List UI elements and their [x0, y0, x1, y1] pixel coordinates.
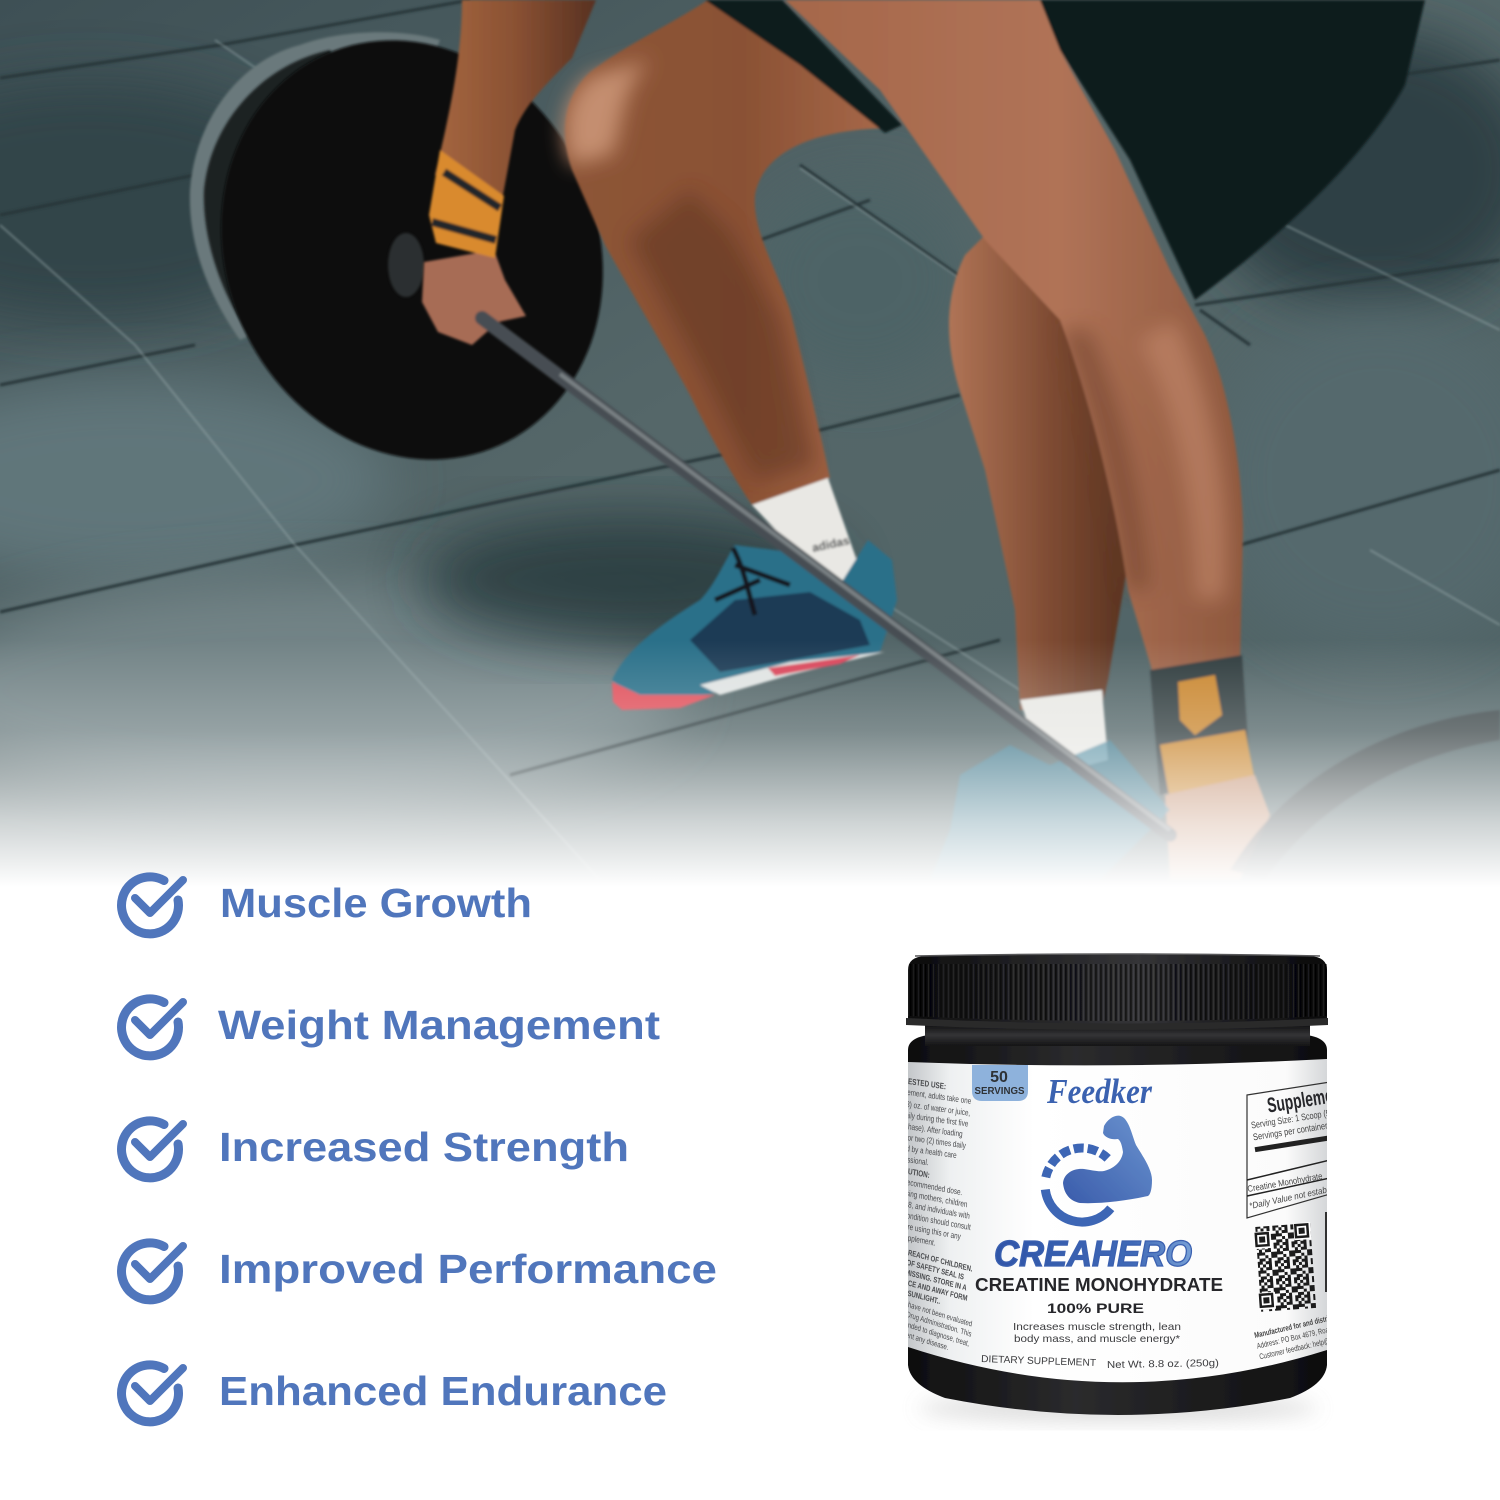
weight plate: [188, 32, 604, 462]
servings badge: SERVINGS: [974, 1086, 1025, 1097]
figure: limbs, shorts, shoes: [422, 0, 1500, 880]
socks: adidas: [811, 533, 851, 555]
shorts: [705, 0, 1425, 300]
usage and warning text: sing mothers, children: [905, 1188, 968, 1210]
usage and warning text: 8) oz. of water or juice,: [906, 1099, 971, 1118]
jar neck: [925, 1024, 1310, 1046]
benefit: improved performance: Improved Performance: [219, 1246, 717, 1292]
usage and warning text: OF SAFETY SEAL IS: [906, 1259, 965, 1282]
usage and warning text: ended to diagnose, treat,: [904, 1321, 970, 1349]
usage and warning text: ed by a health care: [902, 1143, 957, 1160]
usage and warning text: vent any disease.: [902, 1331, 949, 1352]
foreground plate: [1230, 710, 1500, 880]
manufacturer text: Manufactured for and distributed: [1253, 1310, 1345, 1340]
supplement type and net weight: Net Wt. 8.8 oz. (250g): [1107, 1358, 1219, 1371]
benefit list: [122, 877, 717, 1422]
check icon: [122, 1121, 183, 1178]
check icon: [122, 1243, 183, 1300]
usage and warning text: condition should consult: [903, 1210, 972, 1233]
usage and warning text: phase). After loading: [904, 1121, 963, 1139]
shadow on floor: [420, 515, 840, 645]
product subtitle: CREATINE MONOHYDRATE: [975, 1275, 1223, 1295]
benefit: enhanced endurance: Enhanced Endurance: [219, 1368, 667, 1414]
QR code: [1253, 1222, 1316, 1312]
jar lid: [906, 954, 1328, 1030]
check icon: [122, 877, 183, 934]
right arm (viewer's left) with wrist wrap and hand: [422, 0, 596, 345]
benefit: weight management: [122, 999, 660, 1056]
benefit: muscle growth: Muscle Growth: [220, 880, 532, 926]
wrist wrap on second arm: [1150, 655, 1255, 800]
barbell: [482, 318, 1170, 835]
supplement facts panel: Suppleme: [1266, 1085, 1334, 1118]
product name: CREAHERO: [994, 1233, 1192, 1274]
usage and warning text: fessional.: [902, 1154, 929, 1168]
usage and warning text: supplement.: [901, 1231, 936, 1248]
brand logo: Feedker: [1046, 1072, 1152, 1111]
usage and warning text: ement, adults take one: [907, 1087, 972, 1106]
barcode edge: [1325, 1212, 1327, 1292]
usage and warning text: aily during the first five: [905, 1110, 969, 1129]
benefit: increased strength: Increased Strength: [219, 1124, 629, 1170]
check icon: [122, 1365, 183, 1422]
left leg: thigh and calf: [565, 0, 890, 505]
usage and warning text: 18, and individuals with: [904, 1199, 970, 1221]
servings badge: 50: [990, 1069, 1008, 1086]
benefit: enhanced endurance: [122, 1365, 667, 1422]
supplement facts panel: Servings per container: 50: [1252, 1119, 1341, 1143]
usage and warning text: fore using this or any: [902, 1221, 962, 1242]
usage and warning text: have not been evaluated: [907, 1301, 973, 1329]
jar label: [908, 1059, 1327, 1382]
usage and warning text: T SUNLIGHT..: [902, 1289, 941, 1306]
check icon: [122, 999, 183, 1056]
fade to white: [0, 640, 1500, 900]
benefit: muscle growth: [122, 877, 532, 934]
usage and warning text: UTION:: [908, 1166, 930, 1180]
usage and warning text: ACE AND AWAY FORM: [903, 1279, 968, 1303]
left arm: thigh and forearm: [785, 0, 1243, 670]
back shoe: [951, 740, 1170, 836]
usage and warning text: MISSING. STORE IN A: [905, 1269, 967, 1293]
benefit: weight management: Weight Management: [218, 1002, 660, 1048]
benefit: increased strength: [122, 1121, 629, 1178]
supplement facts panel: *Daily Value not established: [1248, 1180, 1349, 1211]
usage and warning text: ESTED USE:: [908, 1076, 946, 1092]
manufacturer text: Address: PO Box 4679, Road Town: [1256, 1321, 1348, 1351]
usage and warning text: ) or two (2) times daily: [903, 1132, 967, 1151]
usage and warning text: REACH OF CHILDREN.: [907, 1249, 973, 1274]
benefit: improved performance: [122, 1243, 717, 1300]
gym floor: [0, 0, 1500, 900]
purity line: 100% PURE: [1047, 1300, 1144, 1316]
jar shadow: [918, 1394, 1318, 1422]
supplement type and net weight: DIETARY SUPPLEMENT: [981, 1354, 1096, 1369]
manufacturer text: Customer feedback: help@feedker: [1258, 1332, 1350, 1361]
product jar: [901, 954, 1350, 1422]
bicep logo: [1045, 1116, 1152, 1222]
hand of second arm: [1165, 775, 1270, 880]
manufacturer text: [1254, 1315, 1327, 1359]
servings badge: [972, 1065, 1028, 1101]
product description: body mass, and muscle energy*: [1014, 1333, 1180, 1345]
usage and warning text: Drug Administration. This: [906, 1311, 972, 1339]
back leg calf and ankle: [949, 235, 1150, 715]
supplement facts panel: Creatine Monohydrate: [1247, 1171, 1323, 1194]
front shoe: [612, 540, 897, 710]
product description: Increases muscle strength, lean: [1013, 1321, 1181, 1333]
product description: [1014, 1322, 1180, 1344]
supplement facts panel: [1246, 1082, 1327, 1219]
supplement facts panel: Serving Size: 1 Scoop (5g): [1250, 1107, 1337, 1131]
usage and warning text: [908, 1078, 972, 1350]
usage and warning text: ecommended dose.: [906, 1177, 963, 1197]
socks: [752, 478, 1108, 770]
jar body: [908, 1034, 1327, 1415]
background photo: barbell deadlift: [0, 0, 1500, 900]
supplement type and net weight: [982, 1355, 1218, 1369]
